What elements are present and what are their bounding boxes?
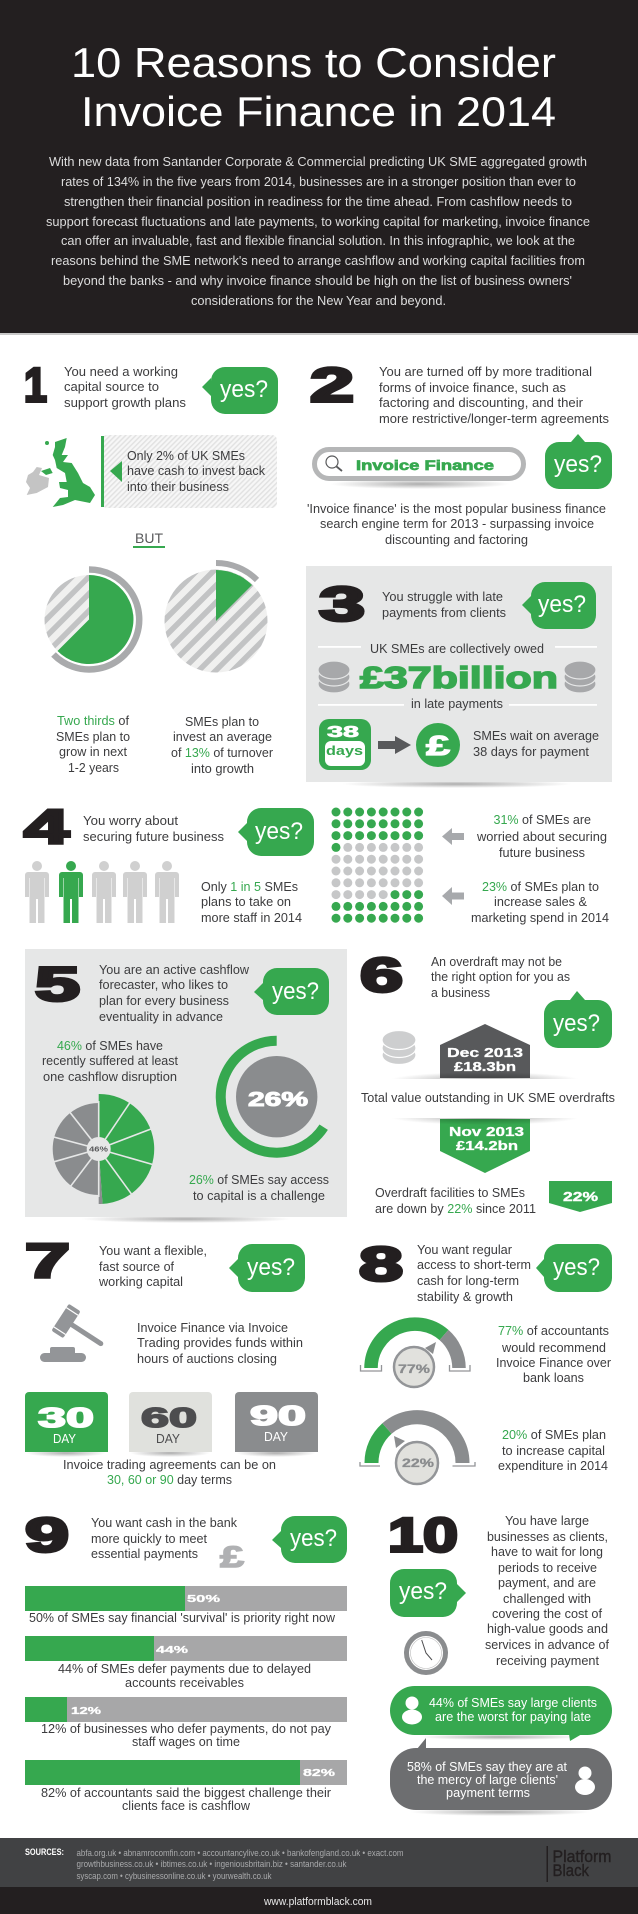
icon: coins right [564, 661, 596, 693]
callout: only 2%: Only 2% of UK SMEs [127, 448, 245, 463]
reason 1 text [64, 364, 186, 410]
term box: 30 day: DAY [53, 1431, 76, 1446]
reason 3 text [382, 589, 506, 620]
yes bubble [254, 968, 329, 1015]
intro paragraph: strengthen their financial position in readiness for the time ahead. From cashflow needs to [64, 195, 572, 209]
Dec 2013 label: Dec 2013 [447, 1046, 523, 1060]
reason 3 text: payments from clients [382, 605, 506, 620]
77 percent text: would recommend [501, 1340, 606, 1355]
pie chart: 13 percent [164, 563, 268, 672]
reason 9 text: more quickly to meet [91, 1531, 207, 1546]
number 4: 4 [24, 802, 70, 854]
terms caption: 30, 60 or 90 day terms [107, 1472, 232, 1487]
icon: calendar 38 days: 38 [327, 724, 359, 741]
icon: calendar 38 days [319, 719, 371, 770]
1 in 5 text: Only 1 in 5 SMEs [201, 879, 298, 894]
panel: reason 10 [388, 1510, 612, 1816]
total value text: Total value outstanding in UK SME overdrafts [361, 1090, 615, 1105]
46 percent text: recently suffered at least [42, 1053, 178, 1068]
callout: only 2%: into their business [127, 479, 229, 494]
reason 8 text: stability & growth [417, 1289, 513, 1304]
Dec 2013 label: £18.3bn [454, 1060, 516, 1074]
reason 10 text: businesses as clients, [487, 1529, 608, 1544]
callout: 58 percent [390, 1738, 612, 1816]
up pentagon: Dec 2013 shape [440, 1024, 530, 1078]
pie caption left [56, 713, 130, 775]
reason 10 text: covering the cost of [492, 1606, 602, 1621]
23 percent text: 23% of SMEs plan to [482, 879, 599, 894]
divider lines [318, 646, 361, 648]
46 percent text [42, 1038, 178, 1084]
yes bubble: yes? [247, 1254, 295, 1281]
reason 4 text [83, 813, 224, 844]
reason 2 text [379, 364, 609, 426]
down badge 22 percent [549, 1181, 612, 1212]
pie caption left: grow in next [59, 744, 127, 759]
reason 10 text: receiving payment [496, 1653, 599, 1668]
pie caption left: Two thirds of [57, 713, 129, 728]
caption: 12 percent: staff wages on time [132, 1734, 240, 1749]
caption: 50 percent: 50% of SMEs say financial 'survival' is priority right now [29, 1610, 336, 1625]
big number: £37billion [360, 660, 558, 695]
reason 10 text [485, 1513, 609, 1668]
down badge 22 percent: 22% [563, 1189, 599, 1204]
sources label: SOURCES: [25, 1847, 64, 1858]
icon: gavel [40, 1304, 112, 1362]
term box: 60 day [129, 1392, 212, 1457]
number 2: 2 [310, 360, 354, 412]
panel: reason 6 [352, 950, 622, 1216]
yes bubble [545, 434, 612, 489]
reason 6 text: An overdraft may not be [431, 954, 562, 969]
overdraft down text [375, 1185, 536, 1216]
pie caption right: SMEs plan to [185, 714, 259, 729]
wait text [473, 728, 599, 759]
31 percent text: worried about securing [476, 829, 607, 844]
search term description [307, 501, 606, 547]
arrow: 23 percent [442, 887, 464, 905]
23 percent text: marketing spend in 2014 [471, 910, 609, 925]
sources list [76, 1848, 404, 1882]
term box: 90 day: DAY [264, 1429, 288, 1444]
yes bubble: yes? [255, 818, 303, 845]
reason 8 text: access to short-term [417, 1257, 531, 1272]
icon: pound circle: £ [426, 730, 451, 761]
number 8: 8 [359, 1238, 403, 1292]
callout: 44 percent [390, 1686, 612, 1741]
panel: reason 3 [306, 566, 612, 788]
number 6: 6 [360, 950, 403, 1002]
reason 10 text: challenged with [503, 1591, 591, 1606]
caption: 12 percent [41, 1721, 331, 1749]
yes bubble: yes? [272, 978, 319, 1005]
reason 10 text: services in advance of [485, 1637, 609, 1652]
sources list: abfa.org.uk • abnamrocomfin.com • accountancylive.co.uk • bankofengland.co.uk • exact.com [76, 1848, 404, 1859]
title: Invoice Finance in 2014 [81, 88, 556, 135]
panel: reason 5 [25, 949, 347, 1223]
callout: 58 percent: 58% of SMEs say they are at [407, 1760, 568, 1774]
77 percent text: 77% of accountants [498, 1323, 609, 1338]
bar: 44 percent: 44% [156, 1645, 188, 1656]
reason 10 text: You have large [505, 1513, 589, 1528]
pie caption right [171, 714, 274, 776]
pie caption right: of 13% of turnover [171, 745, 274, 760]
reason 7 text: working capital [98, 1274, 183, 1289]
heading: but: BUT [135, 530, 163, 546]
bar: 82 percent [25, 1760, 347, 1785]
46 percent text: one cashflow disruption [43, 1069, 177, 1084]
Nov 2013 label: Nov 2013 [449, 1125, 524, 1139]
1 in 5 text: plans to take on [201, 894, 291, 909]
down pentagon: Nov 2013 shape [440, 1119, 530, 1173]
reason 7 text: You want a flexible, [99, 1243, 207, 1258]
callout: only 2% [101, 435, 277, 508]
intro paragraph: rates of 134% in the five years from 2014, businesses are in a stronger position than ever to [61, 175, 576, 189]
late payments label: in late payments [411, 696, 503, 711]
reason 2 text: factoring and discounting, and their [379, 395, 584, 410]
1 in 5 text: more staff in 2014 [201, 910, 302, 925]
arrow: 31 percent [442, 828, 464, 845]
caption: 82 percent [41, 1785, 332, 1813]
bar: 44 percent [25, 1636, 347, 1661]
bar: 50 percent [25, 1586, 347, 1611]
20 percent text: to increase capital [502, 1443, 605, 1458]
reason 6 text: a business [431, 985, 490, 1000]
invoice trading text: hours of auctions closing [137, 1351, 277, 1366]
number 9: 9 [25, 1510, 69, 1562]
reason 7 text [98, 1243, 207, 1289]
reason 1 text: support growth plans [64, 395, 186, 410]
sources list: growthbusiness.co.uk • ibtimes.co.uk • ingeniousbritain.biz • santander.co.uk [76, 1859, 347, 1870]
yes bubble [522, 582, 596, 629]
search term description: 'Invoice finance' is the most popular business finance [307, 501, 606, 516]
logo: Platform Black: Black [552, 1861, 589, 1880]
yes bubble [272, 1516, 347, 1563]
pie caption left: 1-2 years [68, 760, 119, 775]
title [71, 39, 556, 135]
segmented pie chart: 46% [89, 1146, 109, 1154]
panel: reason 4 [24, 802, 609, 925]
reason 10 text: high-value goods and [487, 1621, 608, 1636]
search bar: Invoice Finance [356, 457, 494, 473]
number 3: 3 [319, 578, 365, 632]
callout: only 2%: have cash to invest back [127, 463, 265, 478]
overdraft down text: are down by 22% since 2011 [375, 1201, 536, 1216]
number 10: 10 [388, 1510, 458, 1562]
caption: 44 percent: accounts receivables [125, 1675, 244, 1690]
callout: 58 percent: the mercy of large clients' [417, 1773, 558, 1787]
caption: 44 percent: 44% of SMEs defer payments due to delayed [58, 1661, 311, 1676]
search term description: discounting and factoring [385, 532, 528, 547]
bar: 12 percent [25, 1697, 347, 1722]
gauge 20 percent: 22% [402, 1456, 434, 1470]
gauge 77 percent: 77% [398, 1362, 430, 1376]
invoice trading text: Trading provides funds within [137, 1335, 303, 1350]
26 percent text: to capital is a challenge [193, 1188, 325, 1203]
gauge 77 percent [360, 1324, 470, 1387]
20 percent text: 20% of SMEs plan [502, 1427, 606, 1442]
20 percent text [498, 1427, 608, 1473]
icon: pound circle [416, 723, 460, 767]
icon: calendar 38 days: days [326, 743, 363, 758]
panel: reason 9 [25, 1510, 347, 1813]
bar: 12 percent: 12% [71, 1706, 101, 1717]
20 percent text: expenditure in 2014 [498, 1458, 608, 1473]
number 7: 7 [25, 1236, 70, 1288]
term box: 60 day: 60 [141, 1402, 197, 1433]
wait text: 38 days for payment [473, 744, 589, 759]
logo: Platform Black [546, 1846, 612, 1882]
23 percent text [471, 879, 609, 925]
reason 8 text [417, 1242, 531, 1304]
26 percent text: 26% of SMEs say access [189, 1172, 329, 1187]
reason 6 text: the right option for you as [431, 969, 570, 984]
reason 10 text: periods to receive [498, 1560, 597, 1575]
reason 1 text: capital source to [64, 379, 159, 394]
website: www.platformblack.com [263, 1896, 372, 1908]
panel: reason 1 [24, 360, 278, 776]
Nov 2013 label [449, 1125, 524, 1153]
search term description: search engine term for 2013 - surpassing invoice [320, 516, 594, 531]
invoice trading text: Invoice Finance via Invoice [137, 1320, 288, 1335]
reason 4 text: securing future business [83, 829, 224, 844]
yes bubble [202, 367, 278, 414]
intro paragraph: reasons behind the SME network's need to arrange cashflow and working capital facilities from [51, 254, 585, 268]
31 percent text: future business [499, 845, 585, 860]
terms caption: Invoice trading agreements can be on [63, 1457, 276, 1472]
yes bubble: yes? [290, 1525, 337, 1552]
reason 10 text: have to wait for long [491, 1544, 603, 1559]
arrow [378, 736, 411, 754]
reason 7 text: fast source of [99, 1259, 174, 1274]
yes bubble [390, 1569, 466, 1617]
46 percent text: 46% of SMEs have [57, 1038, 163, 1053]
caption: 82 percent: 82% of accountants said the biggest challenge their [41, 1785, 332, 1800]
dot matrix chart [332, 808, 423, 923]
intro paragraph: can offer an invaluable, fast and flexible financial solution. In this infographic, we look at the [61, 234, 575, 248]
search bar [314, 450, 524, 489]
invoice trading text [137, 1320, 303, 1366]
shadow band [352, 1072, 622, 1125]
reason 5 text: plan for every business [99, 993, 229, 1008]
pie caption right: into growth [191, 761, 254, 776]
1 in 5 text [201, 879, 302, 925]
segmented pie chart [52, 1094, 154, 1204]
Dec 2013 label [447, 1046, 523, 1074]
intro paragraph: considerations for the New Year and beyond. [191, 294, 446, 308]
reason 6 text [431, 954, 570, 1000]
yes bubble: yes? [538, 591, 586, 618]
term box: 30 day: 30 [38, 1402, 94, 1433]
term box: 90 day [235, 1392, 318, 1457]
yes bubble [238, 808, 314, 856]
terms caption [63, 1457, 276, 1487]
reason 5 text: forecaster, who likes to [99, 977, 228, 992]
reason 9 text: You want cash in the bank [91, 1515, 237, 1530]
yes bubble [536, 1244, 612, 1292]
ring chart 26 percent [221, 1041, 324, 1153]
pie caption right: invest an average [173, 729, 272, 744]
wait text: SMEs wait on average [473, 728, 599, 743]
reason 9 text: essential payments [91, 1546, 198, 1561]
header panel [0, 0, 638, 335]
title: 10 Reasons to Consider [71, 39, 556, 86]
reason 5 text: eventuality in advance [99, 1009, 223, 1024]
panel: reason 8 [359, 1238, 612, 1484]
ring chart 26 percent: 26% [248, 1089, 308, 1111]
icon: clock [406, 1634, 446, 1672]
bar: 50 percent: 50% [187, 1594, 220, 1605]
reason 1 text: You need a working [64, 364, 178, 379]
yes bubble [544, 991, 612, 1048]
footer [0, 1838, 638, 1914]
icon: pound sign: £ [220, 1541, 244, 1574]
number 1: 1 [24, 360, 47, 412]
reason 2 text: forms of invoice finance, such as [379, 380, 566, 395]
owed label: UK SMEs are collectively owed [370, 641, 544, 656]
reason 2 text: more restrictive/longer-term agreements [379, 411, 609, 426]
pie chart: two thirds [44, 569, 139, 669]
people icons [25, 861, 179, 923]
yes bubble: yes? [220, 376, 268, 403]
77 percent text [496, 1323, 612, 1385]
31 percent text: 31% of SMEs are [494, 812, 591, 827]
reason 5 text [99, 962, 250, 1024]
pie caption left: SMEs plan to [56, 729, 130, 744]
callout: 44 percent: are the worst for paying late [435, 1710, 591, 1724]
intro paragraph: With new data from Santander Corporate & Commercial predicting UK SME aggregated growth [49, 155, 587, 169]
icon: coins left [318, 661, 350, 693]
reason 8 text: You want regular [417, 1242, 513, 1257]
yes bubble [229, 1244, 305, 1292]
reason 2 text: You are turned off by more traditional [379, 364, 592, 379]
23 percent text: increase sales & [494, 894, 587, 909]
logo: Platform Black: Platform [552, 1847, 612, 1866]
callout: 44 percent: 44% of SMEs say large clients [429, 1696, 597, 1710]
caption: 82 percent: clients face is cashflow [122, 1798, 251, 1813]
term box: 90 day: 90 [250, 1400, 306, 1431]
callout: 58 percent: payment terms [446, 1786, 530, 1800]
77 percent text: bank loans [523, 1370, 584, 1385]
intro paragraph: support forecast fluctuations and late payments, to working capital for marketing, invoice finance [46, 215, 590, 229]
panel: reason 7 [25, 1236, 318, 1487]
sources list: syscap.com • cybusinessonline.co.uk • yourwealth.co.uk [76, 1871, 272, 1882]
reason 3 text: You struggle with late [382, 589, 503, 604]
yes bubble: yes? [553, 1010, 600, 1037]
caption: 44 percent [58, 1661, 311, 1690]
caption: 12 percent: 12% of businesses who defer payments, do not pay [41, 1721, 331, 1736]
reason 10 text: payment, and are [498, 1575, 596, 1590]
reason 4 text: You worry about [83, 813, 178, 828]
icon: UK map [26, 438, 95, 507]
reason 8 text: cash for long-term [417, 1273, 519, 1288]
reason 5 text: You are an active cashflow [99, 962, 250, 977]
31 percent text [476, 812, 607, 860]
intro paragraph: beyond the banks - and why invoice finance should be high on the list of business owners' [63, 274, 572, 288]
number 5: 5 [35, 958, 80, 1012]
term box: 30 day [25, 1392, 108, 1457]
bar: 82 percent: 82% [303, 1768, 335, 1779]
26 percent text [189, 1172, 329, 1203]
icon: coins [382, 1030, 416, 1064]
yes bubble: yes? [399, 1578, 447, 1605]
77 percent text: Invoice Finance over [496, 1355, 612, 1370]
panel: reason 2 [307, 360, 612, 547]
intro paragraph [46, 155, 590, 308]
term box: 60 day: DAY [156, 1431, 180, 1446]
yes bubble: yes? [553, 1254, 600, 1281]
yes bubble: yes? [554, 451, 602, 478]
overdraft down text: Overdraft facilities to SMEs [375, 1185, 525, 1200]
gauge 20 percent [360, 1417, 475, 1484]
Nov 2013 label: £14.2bn [456, 1139, 518, 1153]
reason 9 text [91, 1515, 237, 1561]
